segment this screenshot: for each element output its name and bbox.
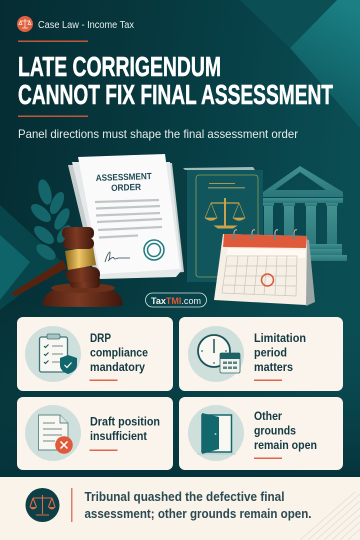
icon: assessment order document	[68, 154, 184, 279]
title: LATE CORRIGENDUM	[18, 51, 221, 82]
footer text	[84, 490, 312, 521]
icon: calendar	[214, 230, 315, 306]
icon: temple	[263, 166, 347, 261]
card: DRP compliance	[17, 317, 173, 391]
icon: gold scales	[205, 198, 245, 228]
subtitle: Panel directions must shape the final assessment order	[18, 127, 298, 141]
illustration	[12, 154, 347, 307]
icon: open door	[197, 413, 236, 454]
card text: Draft position	[90, 416, 160, 428]
footer text: Tribunal quashed the defective final	[84, 490, 284, 504]
card: Limitation period	[179, 317, 343, 391]
header badge	[17, 16, 134, 32]
card text	[90, 416, 160, 443]
card text: remain open	[254, 440, 317, 452]
card text: grounds	[254, 426, 296, 438]
card text: insufficient	[90, 431, 147, 443]
card text: mandatory	[90, 362, 146, 374]
footer text: assessment; other grounds remain open.	[84, 507, 312, 521]
icon: assessment order document: ORDER	[111, 182, 142, 193]
footer panel	[0, 477, 360, 540]
card text: period	[254, 348, 287, 360]
icon: scales	[26, 488, 60, 522]
icon: document with cross	[38, 415, 73, 454]
card text	[254, 411, 317, 452]
card: Draft position	[17, 397, 173, 470]
card text: compliance	[90, 348, 148, 360]
logo pill	[146, 293, 206, 307]
card text	[90, 333, 148, 374]
card: Other grounds	[179, 397, 343, 470]
card text: Other	[254, 411, 282, 423]
card text: DRP	[90, 333, 111, 345]
category label: Case Law - Income Tax	[38, 20, 134, 31]
icon: gavel	[12, 227, 123, 307]
icon: assessment order document: ASSESSMENT	[96, 171, 152, 183]
icon: leaves	[28, 178, 74, 263]
icon: clipboard with shield	[40, 334, 77, 374]
icon: book	[181, 167, 263, 282]
logo pill: TaxTMI.com	[151, 296, 201, 306]
icon: scales badge	[17, 16, 33, 32]
icon: clock and calendar	[198, 335, 240, 373]
card text	[254, 333, 306, 374]
card text: Limitation	[254, 333, 306, 345]
title	[18, 51, 333, 110]
card text: matters	[254, 362, 293, 374]
